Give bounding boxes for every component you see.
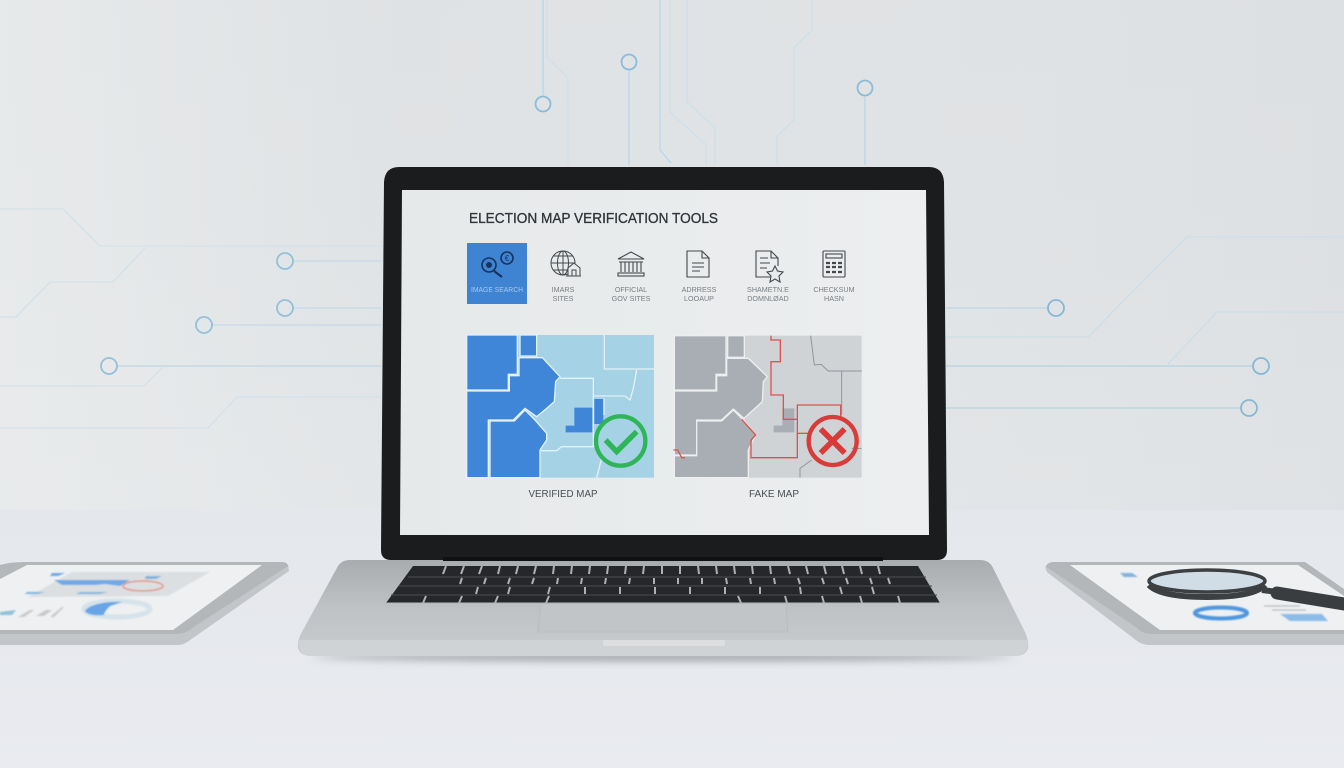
label: verified map: VERIFIED MAP (528, 488, 598, 500)
left tablet (0, 562, 289, 645)
icon: red x badge (809, 417, 857, 465)
right tablet (1045, 562, 1344, 645)
tool: image search (467, 243, 527, 304)
tablet charts (1120, 573, 1328, 621)
label: fake map: FAKE MAP (749, 488, 799, 500)
icon: globe with building (551, 251, 581, 276)
label: image sites: IMARS (552, 285, 575, 294)
tool: shapefile download (747, 251, 789, 303)
tool: checksum hash (813, 251, 855, 303)
label: shapefile download: DOMNLØAD (747, 294, 789, 303)
screen title: ELECTION MAP VERIFICATION TOOLS (469, 211, 718, 227)
label: image search: IMAGE SEARCH (471, 285, 523, 294)
laptop (298, 167, 1028, 661)
tablet map and charts (0, 572, 210, 617)
trackpad (538, 604, 788, 632)
tool: address lookup (682, 251, 717, 303)
magnifying glass (1147, 570, 1344, 604)
icon: green check badge (596, 416, 645, 466)
circuit lines: top (536, 0, 872, 165)
label: shapefile download: SHAMETN.E (747, 285, 789, 294)
front notch (603, 640, 725, 646)
label: checksum hash: CHECKSUM (813, 285, 855, 294)
icon: document with star (756, 251, 783, 282)
label: official gov sites: GOV SITES (612, 294, 651, 303)
tablet screen (0, 565, 262, 630)
label: checksum hash: HASN (824, 294, 844, 303)
circuit lines: left (0, 209, 381, 428)
hinge (443, 557, 883, 561)
circuit lines: right (946, 237, 1344, 416)
laptop base (298, 560, 1028, 656)
laptop lid (381, 167, 947, 560)
label: official gov sites: OFFICIAL (615, 285, 647, 294)
tablet screen (1070, 565, 1344, 630)
label: address lookup: ADRRESS (682, 285, 717, 294)
laptop shadow (313, 653, 1013, 661)
icon: calculator (823, 251, 845, 277)
tool: official gov sites (612, 252, 651, 303)
background wall (0, 0, 1344, 512)
fake map (673, 336, 862, 478)
label: address lookup: LOOAUP (684, 294, 714, 303)
label: image sites: SITES (553, 294, 574, 303)
icon: government building (618, 252, 644, 276)
tool: image sites (551, 251, 581, 303)
icon: magnifier with coin: € (505, 254, 510, 263)
icon: document (687, 251, 709, 277)
verified map (467, 335, 654, 478)
desk surface (0, 510, 1344, 768)
keyboard (386, 566, 940, 603)
laptop screen (400, 190, 929, 535)
